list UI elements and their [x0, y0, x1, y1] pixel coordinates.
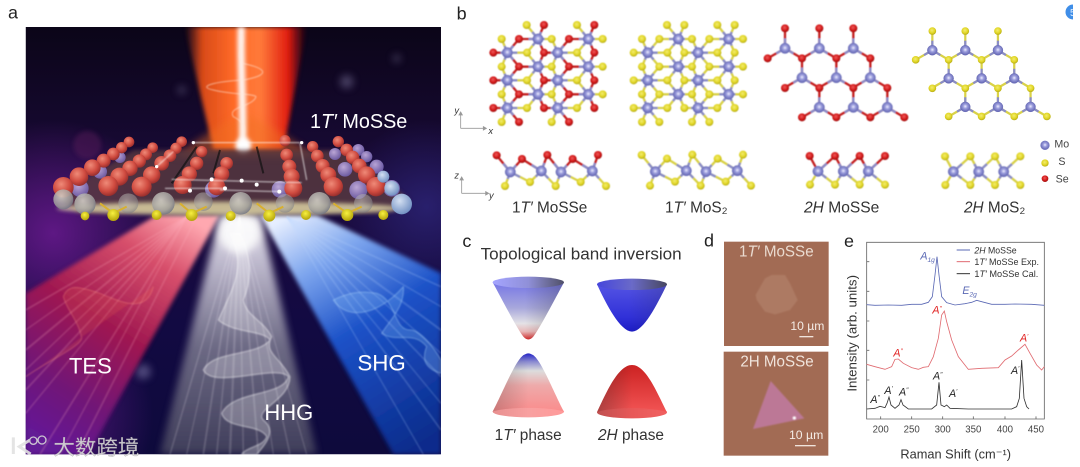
zy axes: z — [453, 171, 459, 181]
caption 1T' phase: 1T′ phase — [495, 427, 562, 444]
Raman spectra chart — [845, 242, 1044, 461]
micrograph: 2H MoSSe — [724, 352, 828, 456]
peak labels: E — [962, 285, 969, 297]
2H MoSSe top view — [764, 24, 908, 121]
label SHG: SHG — [357, 351, 406, 376]
atomic lattice — [53, 135, 412, 222]
label TES: TES — [69, 353, 112, 378]
axes frame — [867, 242, 1044, 419]
tick labels: 250 — [904, 424, 920, 435]
caption 1T' MoS2: 1T′ MoS₂ — [665, 199, 728, 216]
chart legend: 1T′ MoSSe Exp. — [974, 257, 1039, 267]
sulfur bonds — [100, 203, 362, 213]
panel label b: b — [457, 3, 467, 23]
tick labels: 200 — [873, 424, 889, 435]
zy axes: y — [488, 191, 495, 201]
1T' MoSSe side view — [493, 151, 610, 190]
peak labels: A — [932, 305, 939, 317]
peak labels: A — [1020, 333, 1027, 345]
peak labels: 1g — [927, 257, 935, 264]
tick labels — [873, 424, 1044, 435]
HHG wave — [203, 233, 290, 454]
y axis title: Intensity (arb. units) — [845, 275, 860, 392]
peak labels: ′ — [1018, 367, 1020, 373]
peak labels: ′′ — [940, 372, 943, 378]
peak labels: A — [1011, 365, 1018, 377]
illustration scene — [26, 27, 441, 454]
micrograph: 2H MoSSe: 10 µm — [789, 428, 823, 442]
micrograph: 1T' MoSSe — [724, 242, 829, 346]
HHG beam — [160, 213, 317, 454]
1T' MoS2 top view — [630, 21, 747, 126]
corner badge: 5 — [1070, 8, 1076, 19]
tick labels: 400 — [997, 424, 1013, 435]
label 1T' MoSSe: 1T′ MoSSe — [310, 111, 407, 133]
peak labels: ′ — [891, 387, 893, 393]
blue 2H curve — [867, 257, 1044, 305]
panel a: laser illustration — [8, 2, 441, 460]
element legend — [1041, 138, 1069, 185]
xy axes: x — [487, 126, 493, 136]
peak labels: ′′ — [939, 306, 943, 312]
peak labels: 2g — [968, 292, 977, 299]
peak labels — [869, 250, 1029, 406]
bokeh stars — [134, 52, 402, 382]
peak labels: A — [884, 385, 891, 397]
micrograph: 1T' MoSSe: 10 µm — [790, 319, 824, 333]
glowing current lines — [157, 143, 307, 192]
micrograph: 1T' MoSSe: 1T′ MoSSe — [739, 244, 814, 261]
1T' MoSSe top view — [489, 21, 607, 126]
panel b: crystal structures, part 2 — [764, 24, 1069, 217]
peak labels: ′ — [956, 390, 958, 396]
x axis title: Raman Shift (cm⁻¹) — [900, 446, 1011, 461]
red incoming beam — [173, 27, 317, 157]
caption 2H MoSSe: 2H MoSSe — [803, 200, 880, 217]
chart legend: 1T′ MoSSe Cal. — [974, 269, 1038, 279]
panel label a: a — [8, 2, 18, 22]
panel label e: e — [844, 231, 854, 251]
SHG wave — [333, 287, 441, 373]
2H MoS2 side view — [941, 152, 1024, 189]
xy axes: y — [453, 105, 460, 115]
selenium and molybdenum atoms — [71, 144, 400, 199]
xy axes — [453, 105, 493, 136]
TES wave — [26, 287, 153, 377]
cone: 2H valence — [597, 365, 667, 418]
panel c: topological band inversion — [462, 231, 714, 444]
cone: 1T' valence — [493, 353, 564, 417]
chart legend: 2H MoSSe — [973, 245, 1017, 255]
SHG beam — [260, 215, 441, 454]
caption 1T' MoSSe: 1T′ MoSSe — [512, 199, 588, 216]
caption 2H MoS2: 2H MoS₂ — [963, 200, 1025, 217]
caption 2H phase: 2H phase — [597, 427, 664, 444]
core pulse wave — [207, 27, 263, 143]
TES beam — [26, 215, 220, 454]
corner badge — [1066, 4, 1073, 20]
panels d and e — [724, 231, 1044, 461]
peak labels: A — [920, 250, 927, 262]
element legend: S — [1058, 156, 1065, 168]
tick labels: 350 — [965, 424, 981, 435]
zy axes — [453, 171, 495, 201]
2H MoS2 top view — [912, 27, 1051, 120]
element legend: Mo — [1054, 138, 1069, 150]
peak labels: ′′ — [906, 388, 909, 394]
watermark — [13, 436, 139, 460]
grey front atoms — [53, 189, 373, 215]
chart legend — [957, 245, 1039, 279]
peak labels: ′′ — [877, 396, 881, 402]
cone: 2H conduction — [597, 279, 667, 332]
peak labels: A — [870, 394, 877, 406]
label HHG: HHG — [264, 400, 313, 425]
peak labels: A — [899, 386, 906, 398]
tick labels: 450 — [1028, 424, 1044, 435]
2H MoSSe side view — [806, 152, 889, 189]
black calculated curve — [867, 360, 1029, 409]
peak labels: A — [933, 371, 940, 383]
tick labels: 300 — [935, 424, 951, 435]
panel label c: c — [462, 231, 471, 251]
element legend: Se — [1056, 173, 1069, 185]
1T' MoS2 side view — [638, 151, 755, 190]
peak labels: A — [893, 347, 900, 359]
panel b: crystal structures, part 1 — [453, 3, 755, 216]
peak labels: A — [949, 388, 956, 400]
peak labels: ′ — [1027, 334, 1029, 340]
heading: Topological band inversion — [481, 245, 682, 263]
panel label d: d — [704, 231, 714, 251]
peak labels: ′′ — [900, 349, 904, 355]
micrograph: 2H MoSSe: 2H MoSSe — [740, 354, 814, 371]
watermark: 大数跨境 — [53, 437, 139, 460]
red experimental curve — [867, 311, 1044, 370]
cone: 1T' conduction — [493, 277, 564, 339]
sulfur atoms — [81, 209, 388, 222]
